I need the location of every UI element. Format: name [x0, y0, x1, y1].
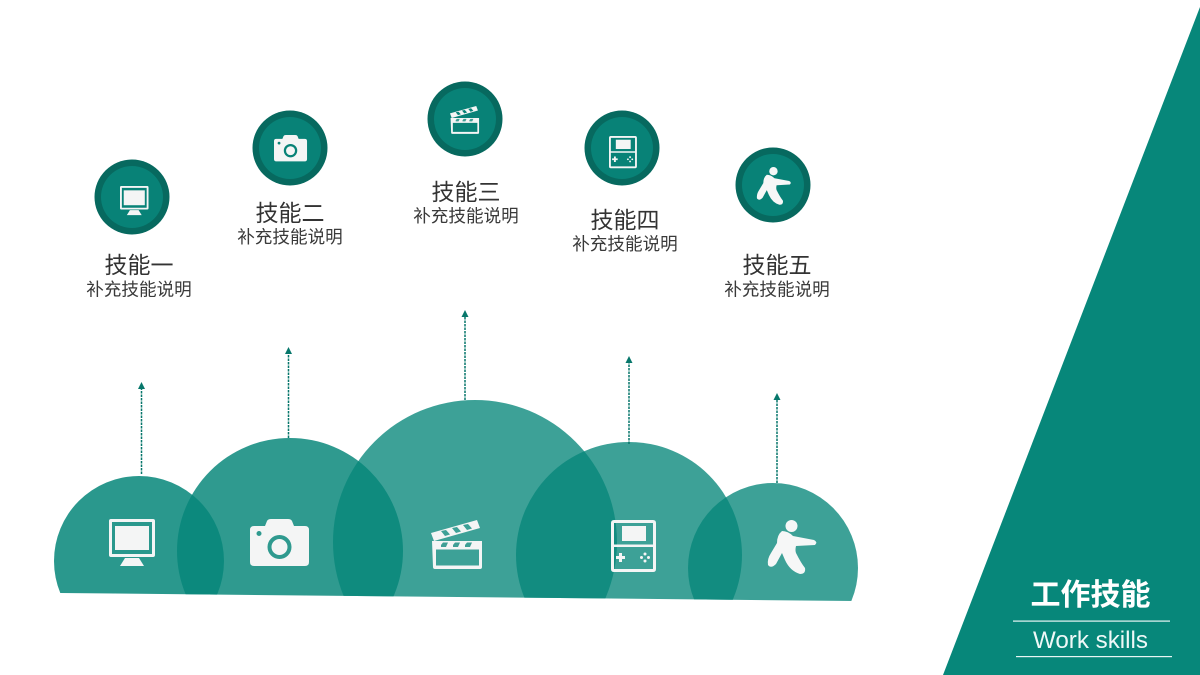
dome chart [54, 400, 858, 601]
bottom divider line [1016, 656, 1172, 657]
arrow 1 [138, 382, 145, 474]
label: skill three [413, 179, 519, 226]
badge 2: camera [252, 110, 328, 186]
dome 3 [333, 400, 617, 598]
label: skill one [86, 252, 192, 300]
arrow 4 [626, 356, 632, 444]
dome icon: clapperboard [431, 520, 482, 569]
label: skill five [724, 252, 830, 300]
arrow 2 [285, 347, 292, 438]
label: skill five: 补充技能说明 [724, 280, 830, 300]
label: skill one: 补充技能说明 [86, 280, 192, 300]
panel title: 工作技能: 工作技能 [1030, 579, 1150, 612]
badge 4: game console [584, 110, 660, 186]
background triangle panel [943, 7, 1200, 675]
dome icon: game console [611, 520, 656, 572]
label: skill five: 技能五 [742, 252, 812, 278]
subtitle: Work skills: Work skills [1033, 627, 1148, 654]
arrow 5 [774, 393, 780, 483]
label: skill four: 技能四 [590, 207, 660, 233]
badge 1: monitor [94, 160, 170, 234]
arrow 3 [462, 310, 468, 400]
badge 3: clapperboard [428, 82, 502, 156]
label: skill four [572, 207, 678, 254]
label: skill four: 补充技能说明 [572, 234, 678, 254]
label: skill two: 技能二 [256, 200, 324, 226]
label: skill two: 补充技能说明 [237, 227, 343, 247]
label: skill two [237, 200, 343, 247]
dome 4 [516, 442, 742, 600]
dome 5 [688, 483, 858, 601]
badge 5: running figure [736, 148, 810, 222]
dome 2 [177, 438, 403, 596]
dome icon: monitor [109, 519, 155, 566]
dome 1 [54, 476, 224, 595]
label: skill one: 技能一 [104, 252, 174, 278]
label: skill three: 补充技能说明 [413, 206, 519, 226]
dome icon: running figure [768, 520, 816, 574]
dome icon: camera [250, 519, 309, 566]
top divider line [1013, 620, 1170, 622]
label: skill three: 技能三 [432, 179, 500, 205]
